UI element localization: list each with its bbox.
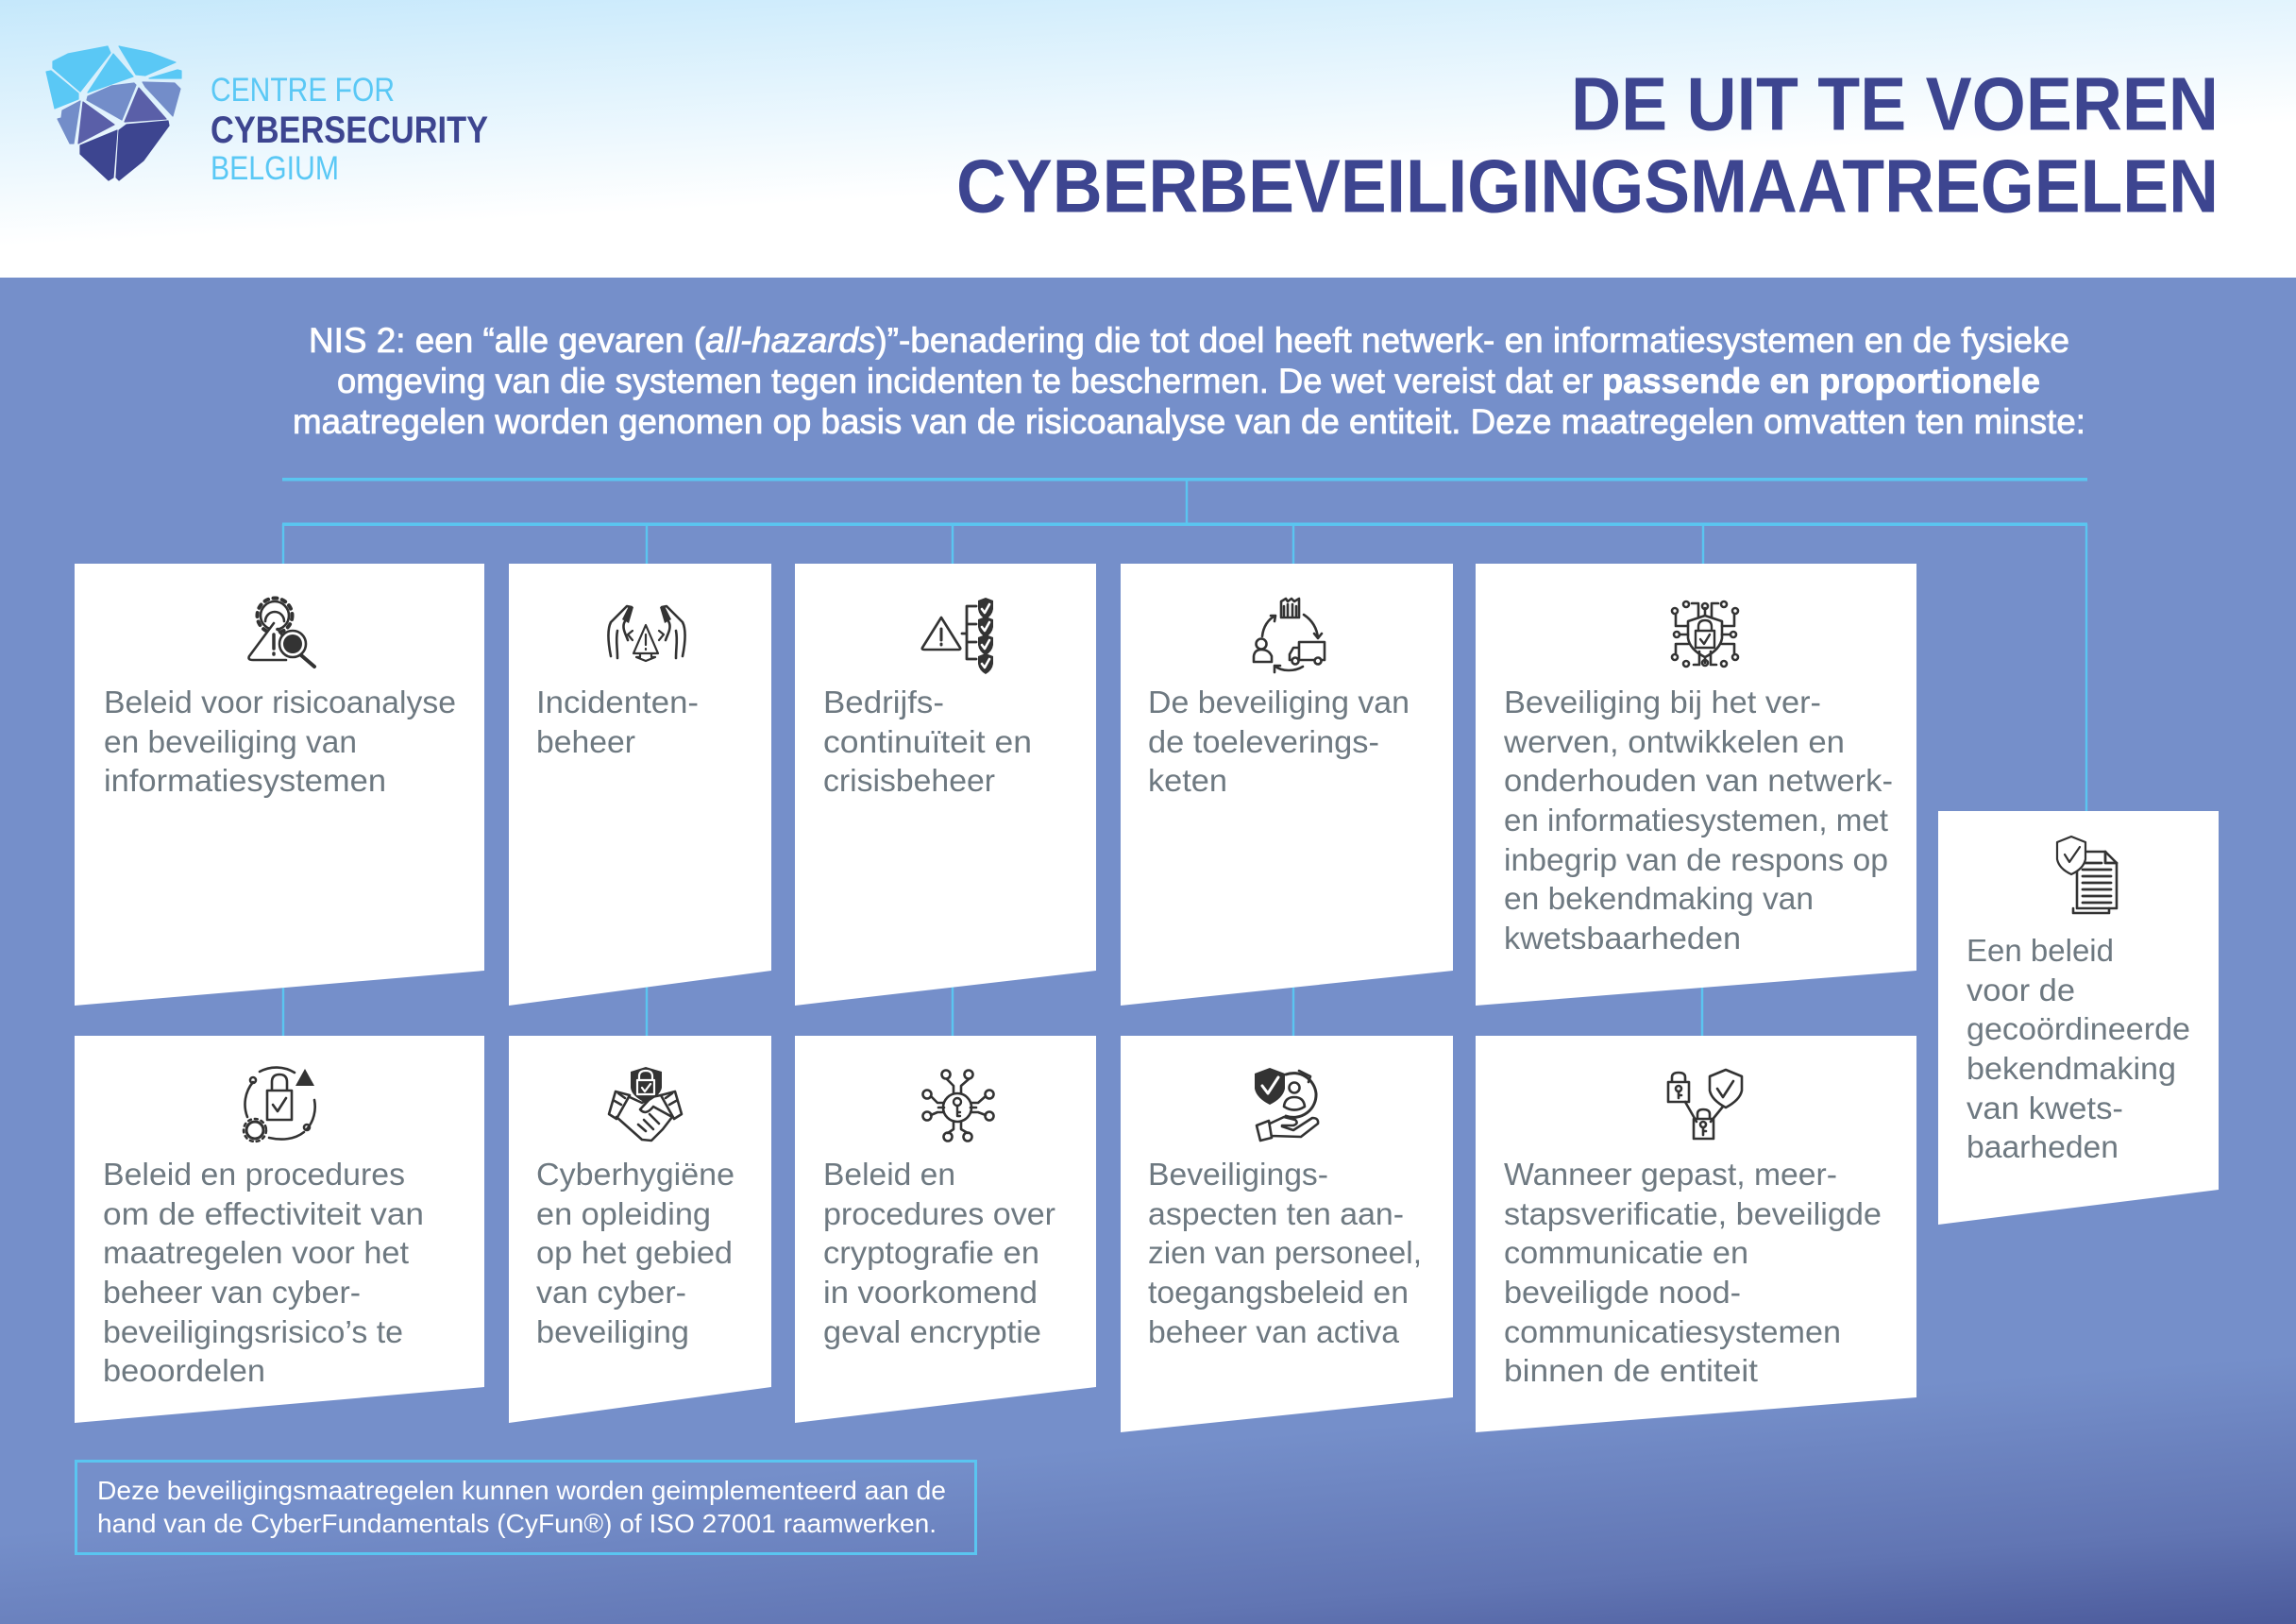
text <box>1967 933 2190 1164</box>
icon: shield with circuit <box>1672 601 1738 667</box>
logo: Centre for Cybersecurity Belgium <box>46 46 488 187</box>
icon: key network <box>923 1071 993 1141</box>
text: zien van personeel, <box>1148 1235 1422 1270</box>
text <box>536 1157 734 1349</box>
text: aspecten ten aan- <box>1148 1196 1404 1231</box>
panel: risicoanalyse <box>75 564 484 1006</box>
intro text <box>293 321 2085 441</box>
text <box>1503 685 1893 956</box>
panel: cyberhygiene <box>509 1036 771 1423</box>
text: voor de <box>1967 973 2075 1007</box>
text: en beveiliging van <box>104 724 357 759</box>
connector tree <box>282 478 2087 1036</box>
text <box>536 685 699 759</box>
text: Beleid voor risicoanalyse <box>104 685 456 719</box>
text: communicatiesystemen <box>1504 1314 1841 1349</box>
text: Incidenten- <box>536 685 699 719</box>
text: om de effectiviteit van <box>103 1196 424 1231</box>
text: continuïteit en <box>823 724 1032 759</box>
text: en opleiding <box>536 1196 711 1231</box>
logo shield <box>46 46 181 180</box>
text: onderhouden van netwerk- <box>1504 763 1893 798</box>
text: in voorkomend <box>823 1275 1038 1310</box>
panel: toeleveringsketen <box>1121 564 1453 1006</box>
text <box>103 1157 424 1388</box>
text: beveiligingsrisico’s te <box>103 1314 403 1349</box>
text: van kwets- <box>1967 1091 2123 1125</box>
panel: gecoordineerde bekendmaking <box>1938 811 2219 1225</box>
text: informatiesystemen <box>104 763 386 798</box>
text: bekendmaking <box>1967 1051 2176 1086</box>
text: de toeleverings- <box>1148 724 1379 759</box>
text: gecoördineerde <box>1967 1011 2190 1046</box>
icon: warning with shield checklist <box>922 598 993 674</box>
intro text: maatregelen worden genomen op basis van de risicoanalyse van de entiteit. Deze maatregelen omvatten ten minste: <box>293 402 2085 441</box>
text: beheer van cyber- <box>103 1275 361 1310</box>
icon: lock cycle <box>244 1068 315 1142</box>
intro text: NIS 2: een “alle gevaren (all-hazards)”-benadering die tot doel heeft netwerk- en informatiesystemen en de fysieke <box>309 321 2069 360</box>
text: Bedrijfs- <box>823 685 944 719</box>
text: werven, ontwikkelen en <box>1503 724 1845 759</box>
panel: cryptografie <box>795 1036 1096 1423</box>
text: Wanneer gepast, meer- <box>1504 1157 1837 1192</box>
text: beoordelen <box>103 1353 265 1388</box>
text <box>823 685 1032 798</box>
panel: incidentenbeheer <box>509 564 771 1006</box>
text: inbegrip van de respons op <box>1504 842 1888 877</box>
icon: gear, warning, magnifier <box>249 599 314 667</box>
text: crisisbeheer <box>823 763 995 798</box>
logo wordmark <box>211 72 488 187</box>
text: en informatiesystemen, met <box>1504 803 1888 837</box>
icon: hands around warning <box>608 606 685 661</box>
text: binnen de entiteit <box>1504 1353 1758 1388</box>
text: maatregelen voor het <box>103 1235 409 1270</box>
text: Beleid en procedures <box>103 1157 405 1192</box>
title: CYBERBEVEILIGINGSMAATREGELEN <box>956 144 2219 228</box>
logo wordmark: BELGIUM <box>211 150 339 187</box>
text: van cyber- <box>536 1275 686 1310</box>
text: beheer <box>536 724 635 759</box>
panel: beveiliging systemen <box>1476 564 1916 1006</box>
title: DE UIT TE VOEREN <box>1571 62 2219 145</box>
logo wordmark: CENTRE FOR <box>211 72 395 109</box>
callout: frameworks note: Deze beveiligingsmaatregelen kunnen worden geimplementeerd aan de <box>97 1476 946 1505</box>
text: Een beleid <box>1967 933 2114 968</box>
text: geval encryptie <box>823 1314 1041 1349</box>
callout: frameworks note <box>76 1462 976 1554</box>
text: procedures over <box>823 1196 1055 1231</box>
text: Beleid en <box>823 1157 955 1192</box>
text <box>1504 1157 1882 1388</box>
icon: shield and handshake <box>609 1067 682 1141</box>
text <box>104 685 456 798</box>
text: Cyberhygiëne <box>536 1157 734 1192</box>
text: beheer van activa <box>1148 1314 1400 1349</box>
text: De beveiliging van <box>1148 685 1410 719</box>
text: Beveiliging bij het ver- <box>1504 685 1821 719</box>
panel: effectiviteit <box>75 1036 484 1423</box>
text: kwetsbaarheden <box>1504 921 1741 956</box>
panel: bedrijfscontinuiteit <box>795 564 1096 1006</box>
icon: supply chain cycle <box>1254 599 1325 672</box>
logo wordmark: CYBERSECURITY <box>211 110 488 151</box>
text: stapsverificatie, beveiligde <box>1504 1196 1882 1231</box>
title <box>956 62 2219 228</box>
text <box>1148 685 1410 798</box>
icon: locks and shield <box>1668 1070 1742 1139</box>
icon: shield and document <box>2057 837 2117 913</box>
text: communicatie en <box>1504 1235 1748 1270</box>
text: toegangsbeleid en <box>1148 1275 1409 1310</box>
text: beveiligde nood- <box>1504 1275 1741 1310</box>
text: keten <box>1148 763 1227 798</box>
text <box>823 1157 1055 1349</box>
intro text: omgeving van die systemen tegen incidenten te beschermen. De wet vereist dat er passende en proportionele <box>337 362 2040 400</box>
panel: personeel en activa <box>1121 1036 1453 1432</box>
callout: frameworks note: hand van de CyberFundamentals (CyFun®) of ISO 27001 raamwerken. <box>97 1509 937 1538</box>
text: beveiliging <box>536 1314 689 1349</box>
text: baarheden <box>1967 1129 2119 1164</box>
panel: meerstapsverificatie <box>1476 1036 1916 1432</box>
text <box>1148 1157 1422 1349</box>
text: Beveiligings- <box>1148 1157 1328 1192</box>
text: cryptografie en <box>823 1235 1039 1270</box>
header background <box>0 0 2296 278</box>
text: op het gebied <box>536 1235 733 1270</box>
icon: shield, person, hand <box>1255 1068 1318 1141</box>
text: en bekendmaking van <box>1504 881 1814 916</box>
